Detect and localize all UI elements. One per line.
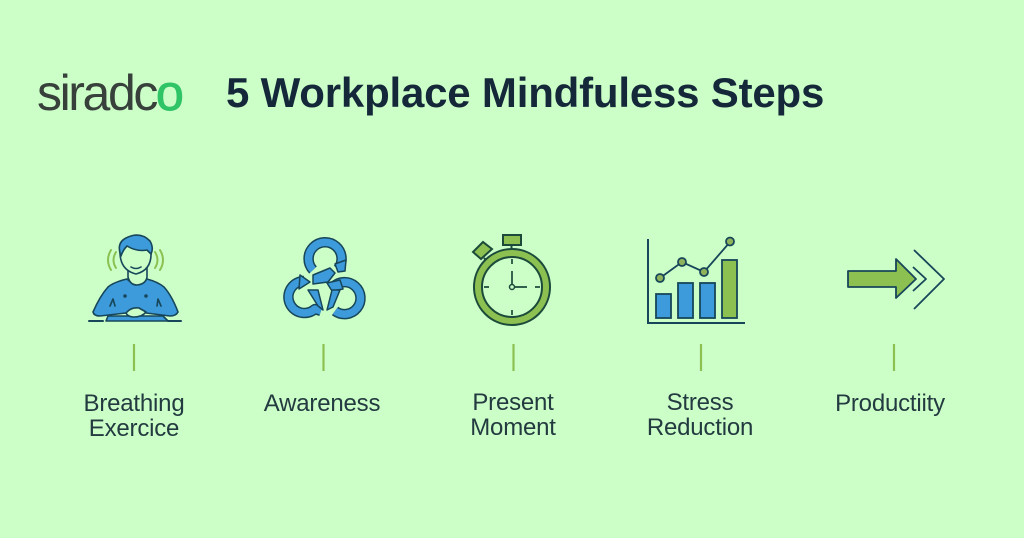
icon: productivity arrow — [848, 250, 944, 309]
icon: person breathing — [89, 235, 181, 321]
label: present moment — [470, 389, 556, 441]
label: breathing exercise: Exercice — [89, 415, 179, 442]
title: 5 Workplace Mindfuless Steps — [226, 69, 824, 116]
connector lines — [134, 344, 894, 371]
label: awareness: Awareness — [264, 390, 380, 417]
label: stress reduction: Reduction — [647, 414, 753, 441]
logo: siradco — [37, 65, 181, 121]
label: stress reduction: Stress — [667, 389, 733, 416]
icon: bar and line chart — [648, 238, 745, 323]
icon: awareness cycle arrows — [288, 242, 360, 314]
icon: stopwatch — [473, 235, 550, 325]
label: stress reduction — [647, 389, 753, 441]
label: productivity: Productiity — [835, 390, 945, 417]
label: present moment: Present — [472, 389, 554, 416]
label: breathing exercise: Breathing — [84, 390, 184, 417]
label: breathing exercise — [84, 390, 184, 442]
label: present moment: Moment — [470, 414, 556, 441]
